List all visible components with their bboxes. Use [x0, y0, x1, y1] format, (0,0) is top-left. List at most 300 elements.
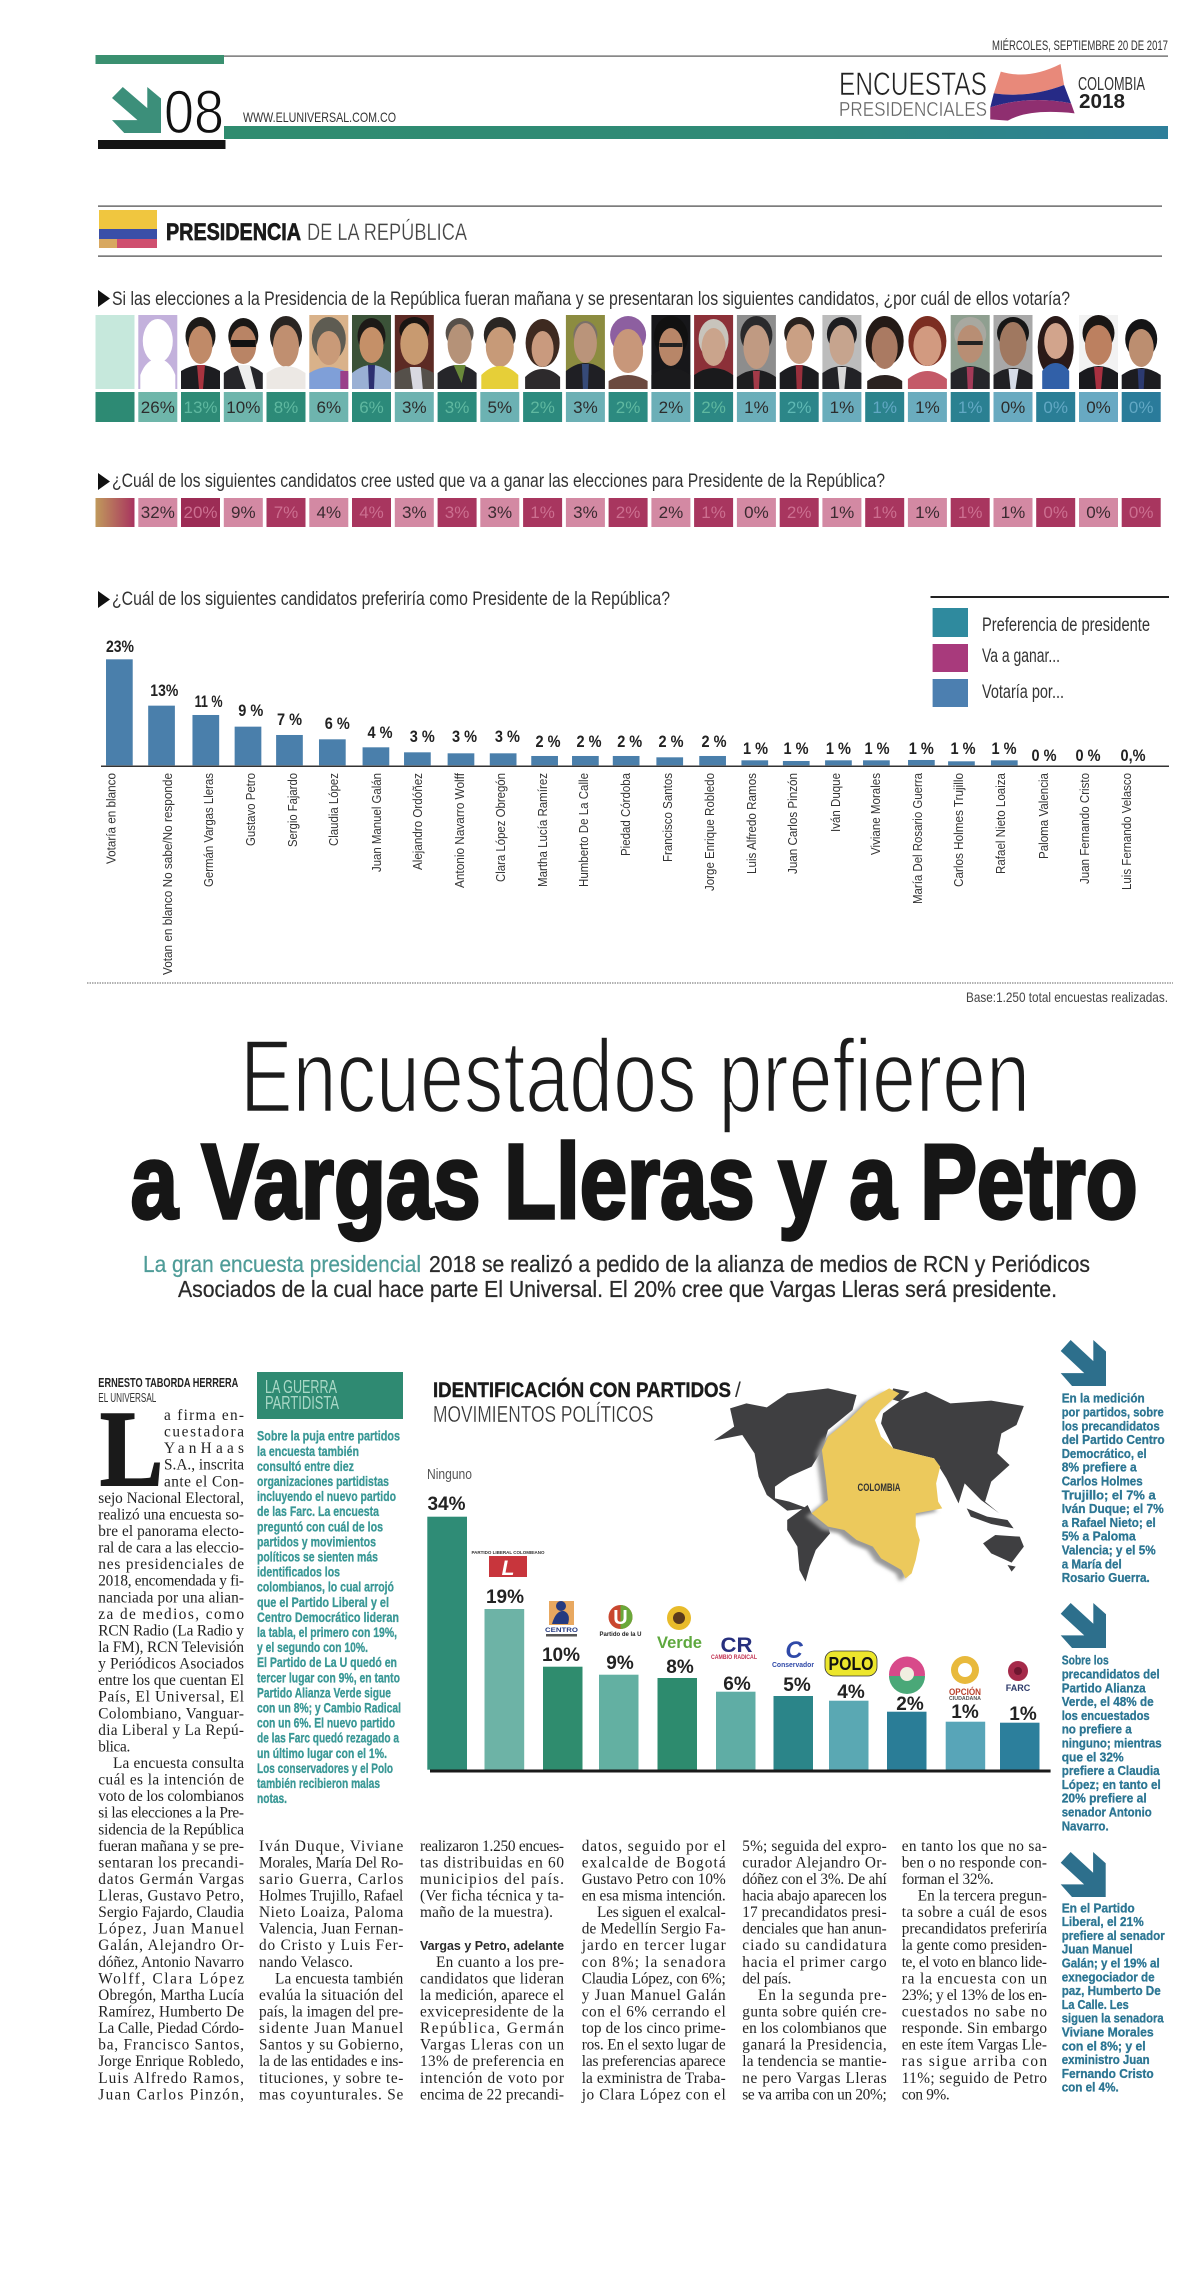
article column 5: ciado su candidatura [742, 1937, 887, 1954]
side note: centro democrático: Carlos Holmes [1062, 1474, 1143, 1488]
ninguno label: Ninguno [427, 1466, 472, 1483]
bar values: 4 % [368, 723, 392, 742]
article column 1: Colombiano, Vanguar- [98, 1705, 244, 1722]
article column 6: ra la encuesta con un [902, 1970, 1047, 1987]
article column 1: cuestadora [164, 1424, 244, 1441]
question 3: ¿Cuál de los siguientes candidatos preferiría como Presidente de la República? [112, 589, 670, 610]
article column 3: En cuanto a los pre- [436, 1954, 564, 1971]
sidebar text: Sobre la puja entre partidos [257, 1429, 400, 1444]
article column 1: sidencia de la República [98, 1821, 244, 1838]
article column 1: entre los que cuentan El [98, 1672, 244, 1689]
vote intention row: 2% [616, 398, 640, 417]
vote intention row: 0% [1043, 398, 1068, 417]
side note: partido liberal: con el 8%; y el [1062, 2038, 1146, 2053]
article column 6: en tanto los que no sa- [902, 1838, 1047, 1855]
subheadline: Asociados de la cual hace parte El Universal. El 20% cree que Vargas Lleras será presidente. [178, 1276, 1057, 1302]
website: WWW.ELUNIVERSAL.COM.CO [243, 109, 396, 125]
bar values: 2 % [702, 732, 726, 751]
vote intention row: 3% [445, 398, 469, 417]
article column 4: Les siguen el exalcal- [597, 1904, 726, 1921]
subheadline: 2018 se realizó a pedido de la alianza de medios de RCN y Periódicos [429, 1251, 1090, 1277]
article column 4: de Medellín Sergio Fa- [582, 1921, 726, 1938]
article column 1: López, Juan Manuel [98, 1921, 244, 1938]
expected winner row: 4% [317, 503, 341, 522]
article column 5: ne pero Vargas Lleras [742, 2070, 887, 2087]
bar values: 2 % [617, 732, 642, 751]
article column 6: 23%; y el 13% de los en- [902, 1987, 1047, 2004]
article column 1: Sergio Fajardo, Claudia [98, 1904, 244, 1921]
vote intention row: 10% [226, 398, 260, 417]
section heading: presidencia: DE LA REPÚBLICA [307, 219, 467, 246]
expected winner row [96, 498, 1161, 527]
subheadline [143, 1251, 1090, 1302]
party values: 5% [783, 1675, 811, 1696]
bar values: 1 % [784, 739, 808, 758]
side note: centro democrático: por partidos, sobre [1062, 1404, 1164, 1420]
article column 1: Jorge Enrique Robledo, [98, 2053, 244, 2070]
article column 1: voto de los colombianos [98, 1788, 244, 1805]
article column 4: Gustavo Petro con 10% [582, 1871, 726, 1888]
article column 1: Lleras, Gustavo Petro, [98, 1888, 244, 1904]
sidebar text: políticos se sienten más [257, 1550, 378, 1564]
vote intention row: 2% [659, 398, 683, 417]
vote intention row: 2% [787, 398, 811, 417]
bar values: 2 % [658, 732, 684, 751]
bar values: 1 % [864, 739, 890, 758]
article column 3: Vargas Lleras con un [420, 2037, 564, 2054]
bar chart: party identification [427, 1466, 1051, 1772]
expected winner row: 32% [141, 503, 175, 522]
bar values: 3 % [452, 727, 477, 746]
side note: partido liberal: Galán; y el 19% al [1062, 1956, 1160, 1970]
election logo [839, 64, 1145, 121]
side note: centro democrático: a Rafael Nieto; el [1062, 1515, 1156, 1530]
side note: centro democrático: a María del [1062, 1556, 1122, 1571]
candidate names: Alejandro Ordóñez [410, 773, 425, 870]
side note: partido liberal: con el 4%. [1062, 2080, 1119, 2095]
legend: Va a ganar... [982, 646, 1060, 667]
side note: centro democrático: En la medición [1062, 1391, 1145, 1406]
article column 4 [581, 1838, 726, 2103]
article column 1: bre el panorama electo- [98, 1523, 244, 1540]
map: world and colombia [714, 1388, 1024, 1582]
article column 1: Obregón, Martha Lucía [98, 1987, 244, 2004]
article column 3: encima de 22 precandi- [420, 2086, 564, 2103]
article column 2: nando Velasco. [259, 1954, 353, 1971]
candidate names: Claudia López [326, 773, 341, 846]
party values [427, 1494, 1037, 1725]
party values: 2% [896, 1694, 924, 1715]
vote intention row [96, 392, 1161, 422]
article column 1: za de medios, como [98, 1606, 244, 1623]
bar values: 0 % [1032, 746, 1056, 765]
article column 1: nes presidenciales de [98, 1556, 244, 1573]
article column 3: República, Germán [420, 2020, 564, 2037]
legend: Votaría por... [982, 682, 1064, 703]
side note: partido liberal: exnegociador de [1062, 1969, 1155, 1984]
article column 5: ganará la Presidencia, [742, 2037, 887, 2054]
candidate names: Luis Alfredo Ramos [744, 773, 759, 874]
side note: alianza verde: Navarro. [1062, 1818, 1109, 1833]
article column 4: en esa misma intención. [582, 1888, 726, 1904]
vote intention row: 0% [1001, 398, 1025, 417]
byline: EL UNIVERSAL [98, 1390, 156, 1405]
sidebar text: que el Partido Liberal y el [257, 1595, 389, 1610]
page header [96, 37, 1168, 149]
vote intention row: 1% [915, 398, 940, 417]
logo: cambio radical: CR [720, 1634, 752, 1657]
sidebar text: Partido Alianza Verde sigue [257, 1685, 391, 1700]
article column 1: ba, Francisco Santos, [98, 2037, 244, 2054]
logo: partido de la u [599, 1605, 642, 1638]
vote intention row: 5% [488, 398, 512, 417]
expected winner row: 2% [616, 503, 640, 522]
side note: partido liberal: paz, Humberto De [1062, 1983, 1161, 1998]
bar values: 2 % [576, 732, 602, 751]
article column 5: 5%; seguida del expro- [742, 1838, 887, 1855]
election logo: ENCUESTAS [839, 66, 987, 102]
logo: centro democrático: CENTRO [545, 1627, 578, 1634]
article column 1: dia Liberal y La Repú- [98, 1722, 244, 1739]
article column 2: La encuesta también [275, 1970, 404, 1987]
candidate names: Luis Fernando Velasco [1119, 773, 1134, 890]
logo: cambio radical: CAMBIO RADICAL [711, 1655, 757, 1661]
side note: alianza verde: Sobre los [1062, 1653, 1109, 1668]
sidebar text: Los conservadores y el Polo [257, 1761, 393, 1776]
party values: 6% [723, 1674, 751, 1695]
candidate names: Carlos Holmes Trujillo [951, 773, 966, 887]
side note: centro democrático: 5% a Paloma [1062, 1529, 1136, 1544]
side note: centro democrático: Trujillo; el 7% a [1062, 1487, 1156, 1502]
bar values: 6 % [325, 714, 350, 733]
article column 2: Holmes Trujillo, Rafael [259, 1888, 403, 1904]
bar values: 3 % [410, 727, 435, 746]
candidate names: Votaría en blanco [104, 773, 119, 864]
expected winner row: 4% [359, 503, 384, 522]
logo: polo: POLO [828, 1654, 874, 1674]
vote intention row: 13% [183, 398, 218, 417]
article column 1 [98, 1407, 244, 2103]
article column 1: Luis Alfredo Ramos, [98, 2070, 244, 2087]
sidebar heading: LA GUERRA [265, 1377, 337, 1397]
article column 5: En la segunda pre- [758, 1987, 887, 2004]
candidate names: Sergio Fajardo [285, 773, 300, 847]
chart title [433, 1378, 741, 1427]
sidebar text: identificados los [257, 1565, 340, 1580]
bar chart: preferred president [101, 637, 1169, 975]
sidebar text: y el segundo con 10%. [257, 1640, 368, 1655]
article column 2: do Cristo y Luis Fer- [259, 1937, 403, 1954]
side note: centro democrático: Rosario Guerra. [1062, 1570, 1150, 1585]
logo: alianza verde [657, 1606, 702, 1652]
side note: centro democrático: Iván Duque; el 7% [1062, 1501, 1164, 1516]
expected winner row: 9% [231, 503, 256, 522]
bar values: 3 % [495, 727, 520, 746]
article column 1: realizó una encuesta so- [98, 1506, 244, 1523]
world continents [714, 1388, 1024, 1582]
article column 5: curador Alejandro Or- [742, 1854, 887, 1871]
article column 6: te, el voto en blanco lide- [902, 1954, 1047, 1971]
sidebar text: con un 8%; y Cambio Radical [257, 1700, 401, 1716]
article column 1: Ramírez, Humberto De [98, 2004, 244, 2020]
chart title: MOVIMIENTOS POLÍTICOS [433, 1401, 654, 1427]
candidate names: Humberto De La Calle [576, 773, 591, 887]
side note: alianza verde: López; en tanto el [1062, 1777, 1161, 1792]
logo: movimiento [889, 1656, 925, 1694]
logo: partido liberal: PARTIDO LIBERAL COLOMBIANO [471, 1550, 545, 1555]
logo: partido conservador: Conservador [772, 1662, 814, 1669]
logo: partido de la u: Partido de la U [599, 1632, 642, 1638]
bar values: 0 % [1076, 746, 1100, 765]
vote intention row: 26% [141, 398, 175, 417]
icon: arrow [1061, 1852, 1106, 1897]
article column 2: la de las entidades e ins- [259, 2053, 403, 2070]
side note: centro democrático: Democrático, el [1062, 1446, 1147, 1461]
logo: opción ciudadana: OPCIÓN [949, 1686, 981, 1697]
bar values: 1 % [992, 739, 1016, 758]
side note: centro democrático [1061, 1340, 1165, 1585]
article column 4: y Juan Manuel Galán [582, 1987, 726, 2004]
bar values: 9 % [238, 701, 263, 720]
sidebar heading: PARTIDISTA [265, 1393, 339, 1413]
side note: partido liberal: La Calle. Les [1062, 1997, 1129, 2012]
sidebar: la guerra partidista [257, 1372, 403, 1806]
election logo: COLOMBIA [1078, 74, 1145, 94]
article column 5: la tendencia se mantie- [742, 2053, 887, 2070]
sidebar text: la encuesta también [257, 1444, 359, 1459]
candidate names: Jorge Enrique Robledo [702, 773, 717, 891]
article column 2: país, la imagen del pre- [259, 2004, 403, 2020]
map: world and colombia: COLOMBIA [858, 1482, 901, 1494]
side note: partido liberal: prefiere al senador [1062, 1928, 1165, 1943]
expected winner row: 7% [274, 503, 298, 522]
party values: 9% [606, 1653, 634, 1674]
sidebar text: El Partido de La U quedó en [257, 1655, 397, 1670]
article column 1: la FM), RCN Televisión [98, 1639, 244, 1656]
article column 6: ben o no responde con- [902, 1854, 1047, 1871]
article column 2: Valencia, Juan Fernan- [259, 1921, 403, 1938]
vote intention row: 1% [830, 398, 854, 417]
article column 1: sentaran los precandi- [98, 1854, 244, 1871]
article column 1: cuál es la intención de [98, 1772, 244, 1788]
expected winner row: 3% [445, 503, 469, 522]
candidate names: Viviane Morales [868, 773, 883, 855]
vote intention row: 1% [958, 398, 982, 417]
side note: centro democrático: los precandidatos [1062, 1418, 1160, 1433]
article column 3: candidatos que lideran [420, 1970, 564, 1987]
question 2: ¿Cuál de los siguientes candidatos cree usted que va a ganar las elecciones para Presidente de la República? [112, 471, 885, 492]
article column 1: blica. [98, 1738, 130, 1755]
candidate names: Juan Carlos Pinzón [785, 773, 800, 874]
vote intention row: 0% [1086, 398, 1111, 417]
article column 1: fueran mañana y se pre- [98, 1838, 244, 1855]
expected winner row: 1% [958, 503, 982, 522]
article column 2: Santos y su Gobierno, [259, 2037, 403, 2054]
article column 1: dóñez, Antonio Navarro [98, 1954, 244, 1971]
article column 1: ante el Con- [164, 1473, 244, 1490]
icon: section arrow [112, 87, 161, 133]
candidate names: Francisco Santos [660, 773, 675, 862]
candidate names: Paloma Valencia [1036, 772, 1051, 859]
article column 3: exvicepresidente de la [420, 2004, 564, 2020]
side note: alianza verde: precandidatos del [1062, 1666, 1160, 1682]
logo: farc [1006, 1661, 1031, 1693]
expected winner row: 1% [830, 503, 854, 522]
sidebar text: preguntó con cuál de los [257, 1519, 383, 1534]
article column 3: municipios del país. [420, 1871, 564, 1888]
chart title: IDENTIFICACIÓN CON PARTIDOS [433, 1378, 731, 1402]
candidate names [104, 772, 1134, 975]
candidate names: Antonio Navarro Wolff [452, 773, 467, 888]
article column 3: (Ver ficha técnica y ta- [420, 1888, 564, 1904]
article column 3: la medición, aparece el [420, 1987, 564, 2004]
side note: centro democrático: del Partido Centro [1062, 1432, 1165, 1447]
party values: 34% [427, 1494, 466, 1515]
side note: alianza verde: Partido Alianza [1062, 1680, 1146, 1695]
side note: alianza verde: senador Antonio [1062, 1804, 1152, 1820]
headline [131, 1019, 1138, 1241]
article column 4: con el 6% cerrando el [582, 2004, 726, 2020]
bars [106, 659, 1018, 765]
legend [930, 596, 1169, 707]
candidate names: Clara López Obregón [493, 773, 508, 882]
bar values: 1 % [743, 739, 768, 758]
party values: 19% [486, 1587, 524, 1608]
article column 3 [420, 1838, 564, 2103]
sidebar text: de las Farc. La encuesta [257, 1504, 379, 1519]
article column 6: cuestados no sabe no [902, 2004, 1047, 2020]
article column 2: Iván Duque, Viviane [259, 1838, 404, 1855]
expected winner row: 1% [1001, 503, 1025, 522]
election logo: PRESIDENCIALES [839, 99, 987, 121]
article column 1: a firma en- [164, 1407, 244, 1424]
article column 2: sidente Juan Manuel [259, 2020, 403, 2037]
logo: partido conservador: C [785, 1637, 803, 1664]
article column 1: S.A., inscrita [164, 1457, 244, 1474]
logo: partido de la u: U [613, 1607, 628, 1629]
side note: alianza verde: ninguno; mientras [1062, 1736, 1162, 1750]
logo: opción ciudadana [949, 1656, 981, 1702]
vote intention row: 8% [274, 398, 298, 417]
article column 4: con 8%; la senadora [582, 1954, 726, 1971]
icon: arrow [1061, 1340, 1106, 1386]
article column 2: evalúa la situación del [259, 1987, 403, 2004]
side note: partido liberal: Fernando Cristo [1062, 2066, 1154, 2081]
section heading: presidencia [98, 206, 1162, 257]
article column 1: Galán, Alejandro Or- [98, 1937, 244, 1954]
article column 5: se va arriba con un 20%; [742, 2086, 887, 2103]
vote intention row: 3% [402, 398, 427, 417]
bar values: 11 % [195, 692, 223, 711]
article column 1: YanHaas [164, 1440, 244, 1457]
sidebar text: con un 6%. El nuevo partido [257, 1716, 395, 1731]
candidate names: Piedad Córdoba [618, 772, 633, 856]
article column 1: Wolff, Clara López [98, 1970, 244, 1987]
article column 3: tas distribuidas en 60 [420, 1854, 564, 1871]
bar values: 1 % [950, 739, 976, 758]
candidate names: Iván Duque [828, 773, 843, 832]
expected winner row: 0% [744, 503, 769, 522]
article column 4: jo Clara López con el [581, 2086, 726, 2103]
expected winner row: 2% [659, 503, 683, 522]
article column 2: tituciones, y sobre te- [259, 2070, 403, 2087]
expected winner row: 1% [872, 503, 897, 522]
article column 5: hacia el primer cargo [742, 1954, 887, 1971]
article column 1: sejo Nacional Electoral, [98, 1490, 244, 1507]
expected winner row: 0% [1086, 503, 1111, 522]
drop cap: L [100, 1390, 163, 1509]
article column 6 [902, 1838, 1047, 2103]
sidebar text: de las Farc quedó rezagado a [257, 1731, 399, 1746]
article column 6: responde. Sin embargo [902, 2020, 1047, 2037]
bar values: 2 % [536, 732, 560, 751]
article column 6: forman el 32%. [902, 1871, 994, 1888]
article column 2: sario Guerra, Carlos [259, 1871, 403, 1888]
candidate names: Votan en blanco No sabe/No responde [160, 773, 175, 975]
article column 5: hacia abajo aparecen los [742, 1888, 887, 1904]
side note: alianza verde: Verde, el 48% de [1062, 1694, 1154, 1709]
bar values: 23% [106, 637, 134, 656]
article column 4: jardo en tercer lugar [581, 1937, 726, 1954]
expected winner row: 2% [787, 503, 811, 522]
section heading: presidencia: PRESIDENCIA [166, 219, 301, 246]
article column 1: y Periódicos Asociados [98, 1656, 244, 1673]
article column 3: realizaron 1.250 encues- [420, 1838, 564, 1855]
article column 3: maño de la muestra). [420, 1904, 553, 1921]
vote intention row: 2% [530, 398, 555, 417]
sidebar heading [257, 1372, 403, 1419]
article column 3: 13% de preferencia en [420, 2053, 564, 2070]
election logo: 2018 [1079, 91, 1125, 113]
article column 5: gunta sobre quién cre- [742, 2004, 887, 2020]
expected winner row: 1% [701, 503, 726, 522]
vote intention row: 3% [573, 398, 598, 417]
article column 6: precandidatos preferiría [902, 1921, 1047, 1938]
side note: partido liberal: siguen la senadora [1062, 2011, 1164, 2026]
article column 2 [259, 1838, 404, 2103]
party values: 1% [951, 1702, 979, 1723]
candidate names: Martha Lucía Ramírez [535, 773, 550, 887]
side note: centro democrático: Valencia; y el 5% [1062, 1542, 1156, 1558]
article column 4: datos, seguido por el [582, 1838, 726, 1855]
article column 1: Juan Carlos Pinzón, [98, 2086, 244, 2103]
bar values: 1 % [826, 739, 851, 758]
expected winner row: 3% [488, 503, 512, 522]
article column 5: 17 precandidatos presi- [742, 1904, 887, 1921]
side note: alianza verde: que el 32% [1062, 1749, 1124, 1764]
vote intention row: 6% [317, 398, 341, 417]
side note: alianza verde: los encuestados [1062, 1708, 1150, 1723]
candidate names: Gustavo Petro [243, 773, 258, 846]
article column 1: ral de cara a las eleccio- [98, 1540, 244, 1557]
article column 5: denciales que han anun- [742, 1921, 887, 1938]
byline: ERNESTO TABORDA HERRERA [98, 1375, 239, 1390]
sidebar text: un último lugar con el 1%. [257, 1746, 387, 1761]
party values: 8% [666, 1657, 694, 1678]
article column 1: País, El Universal, El [98, 1689, 244, 1706]
vote intention row: 6% [359, 398, 384, 417]
candidate names: Rafael Nieto Loaiza [993, 772, 1008, 874]
side note: partido liberal: exministro Juan [1062, 2052, 1150, 2067]
side note: alianza verde: no prefiere a [1062, 1722, 1132, 1737]
expected winner row: 3% [573, 503, 598, 522]
article column 4: top de los cinco prime- [582, 2020, 726, 2037]
article column 6: ta sobre a cuál de esos [902, 1904, 1047, 1921]
icon: colombian flag [99, 210, 157, 248]
article column 6: ras sigue arriba con [902, 2053, 1047, 2070]
side note: partido liberal: Juan Manuel [1062, 1942, 1133, 1957]
page number: 08 [164, 78, 224, 146]
